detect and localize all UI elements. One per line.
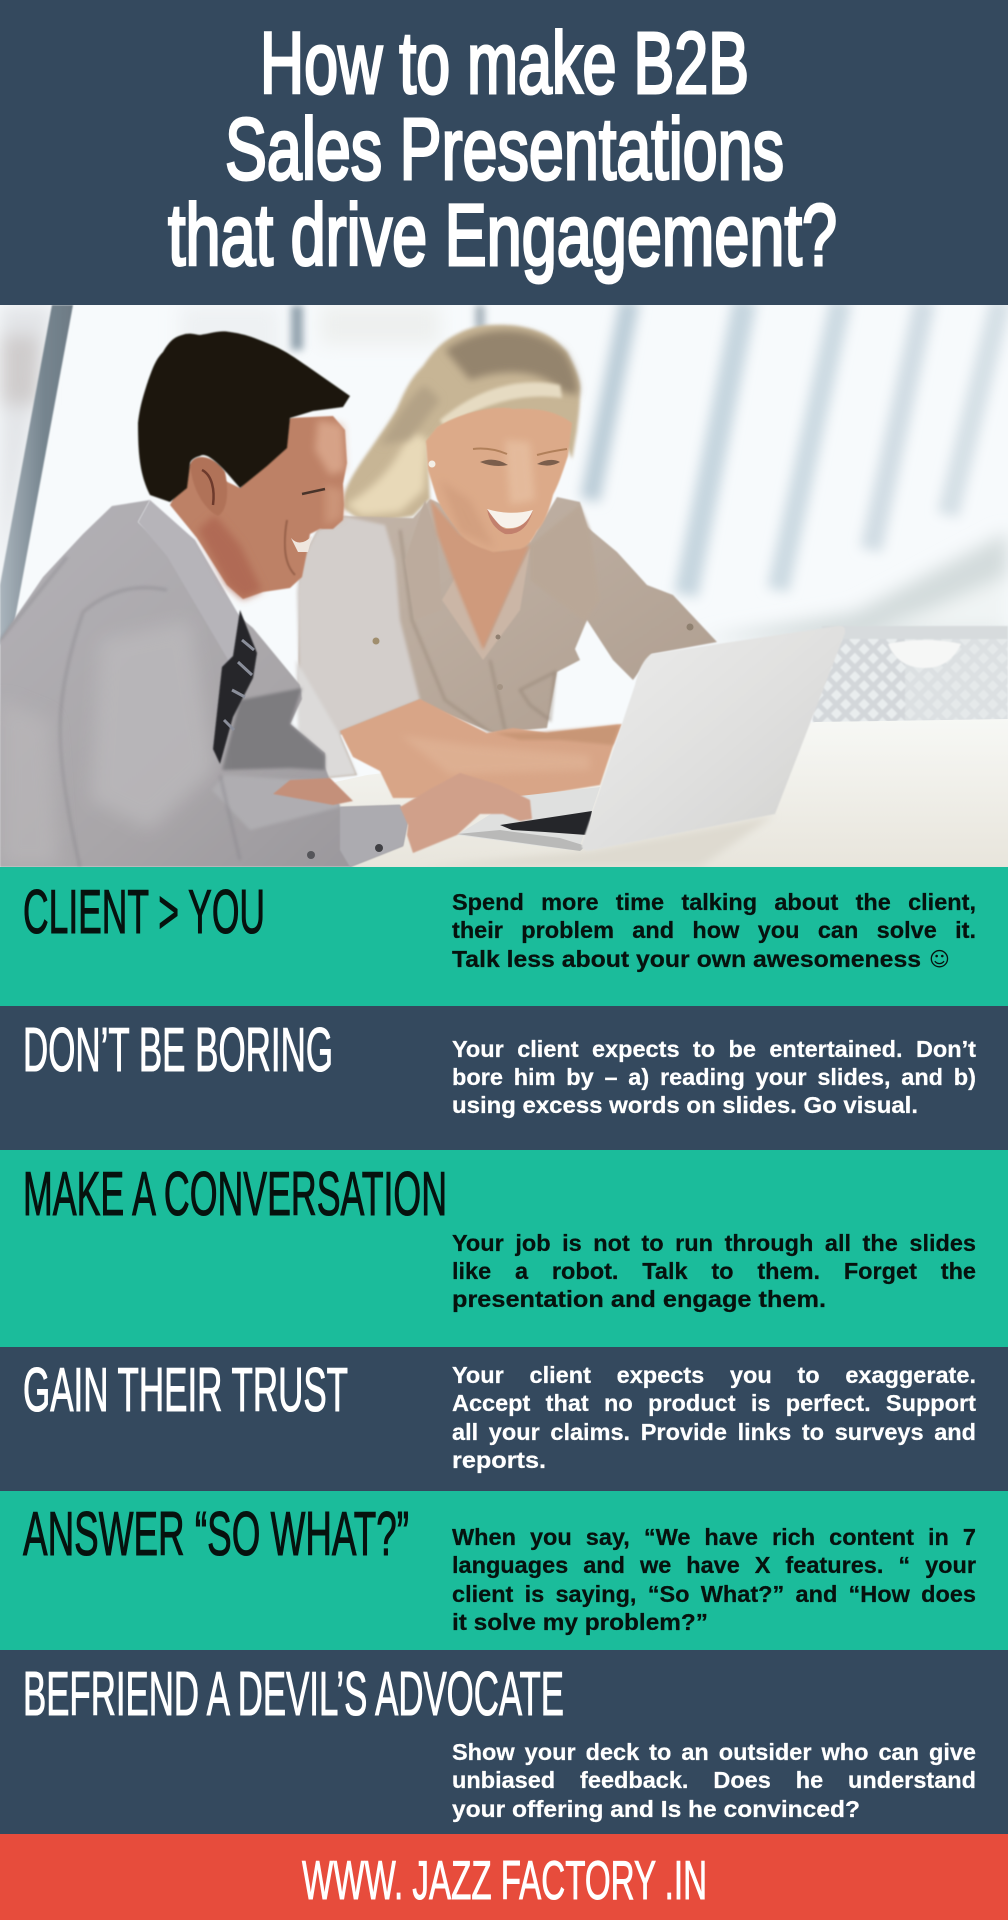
text block bbox=[452, 1230, 976, 1312]
text block: your offering and Is he convinced? bbox=[452, 1796, 860, 1822]
panel: answer so what bbox=[0, 1491, 1008, 1650]
text block: reports. bbox=[452, 1447, 546, 1473]
background windows bbox=[0, 300, 1008, 867]
text block: all your claims. Provide links to surveys and bbox=[452, 1419, 976, 1445]
table bbox=[335, 719, 1008, 867]
text block: Talk less about your own awesomeness bbox=[452, 946, 921, 972]
text block bbox=[452, 1036, 976, 1118]
collar bbox=[138, 500, 242, 663]
neck and face bbox=[170, 416, 347, 599]
ear bbox=[190, 457, 227, 516]
hair bbox=[138, 331, 350, 502]
text block: client is saying, “So What?” and “How does bbox=[452, 1581, 976, 1607]
text block: using excess words on slides. Go visual. bbox=[452, 1092, 918, 1118]
text block: Your client expects to be entertained. Don’t bbox=[452, 1036, 976, 1062]
text block: languages and we have X features. “ your bbox=[452, 1552, 976, 1578]
text block: Accept that no product is perfect. Support bbox=[452, 1390, 976, 1416]
panel: make a conversation bbox=[0, 1150, 1008, 1347]
heading: DON’T BE BORING bbox=[23, 1016, 333, 1085]
hands bbox=[273, 778, 353, 805]
header panel bbox=[0, 0, 1008, 305]
heading: ANSWER “SO WHAT?” bbox=[23, 1500, 409, 1569]
panel: befriend a devil's advocate bbox=[0, 1650, 1008, 1834]
text block: like a robot. Talk to them. Forget the bbox=[452, 1258, 976, 1284]
text block: Show your deck to an outsider who can give bbox=[452, 1739, 976, 1765]
shirt bbox=[0, 500, 408, 867]
text block bbox=[452, 1739, 976, 1822]
photo: two colleagues at a laptop bbox=[0, 305, 1008, 867]
title bbox=[168, 15, 837, 284]
title: How to make B2B bbox=[260, 15, 749, 112]
title: Sales Presentations bbox=[225, 101, 784, 198]
text block: bore him by – a) reading your slides, and b) bbox=[452, 1064, 976, 1090]
panel: don't be boring bbox=[0, 1006, 1008, 1150]
text block: it solve my problem?” bbox=[452, 1609, 708, 1635]
text block bbox=[452, 1524, 976, 1636]
text block: unbiased feedback. Does he understand bbox=[452, 1767, 976, 1793]
heading: GAIN THEIR TRUST bbox=[23, 1356, 348, 1425]
neck bbox=[430, 499, 530, 650]
text block: their problem and how you can solve it. bbox=[452, 917, 976, 943]
text block: Spend more time talking about the client, bbox=[452, 889, 976, 915]
arm bbox=[340, 699, 622, 798]
woman bbox=[296, 325, 717, 798]
text block: Your client expects you to exaggerate. bbox=[452, 1362, 976, 1388]
heading: BEFRIEND A DEVIL’S ADVOCATE bbox=[23, 1660, 564, 1729]
heading: CLIENT > YOU bbox=[23, 878, 265, 947]
tie bbox=[213, 610, 257, 764]
heading: MAKE A CONVERSATION bbox=[23, 1160, 447, 1229]
text block bbox=[452, 1362, 976, 1474]
panel: client > you bbox=[0, 867, 1008, 1006]
website url: WWW. JAZZ FACTORY .IN bbox=[302, 1849, 707, 1911]
chair bbox=[812, 626, 1008, 725]
text block: When you say, “We have rich content in 7 bbox=[452, 1524, 976, 1550]
man bbox=[0, 331, 532, 867]
hair bbox=[343, 325, 580, 522]
footer banner bbox=[0, 1834, 1008, 1920]
laptop bbox=[457, 626, 845, 851]
text block: ☺ bbox=[929, 947, 950, 971]
face bbox=[426, 408, 572, 552]
text block: presentation and engage them. bbox=[452, 1286, 826, 1312]
text block: Your job is not to run through all the slides bbox=[452, 1230, 976, 1256]
text block bbox=[452, 889, 976, 972]
panel: gain their trust bbox=[0, 1347, 1008, 1491]
shirt bbox=[298, 497, 717, 778]
cuff bbox=[340, 805, 408, 867]
